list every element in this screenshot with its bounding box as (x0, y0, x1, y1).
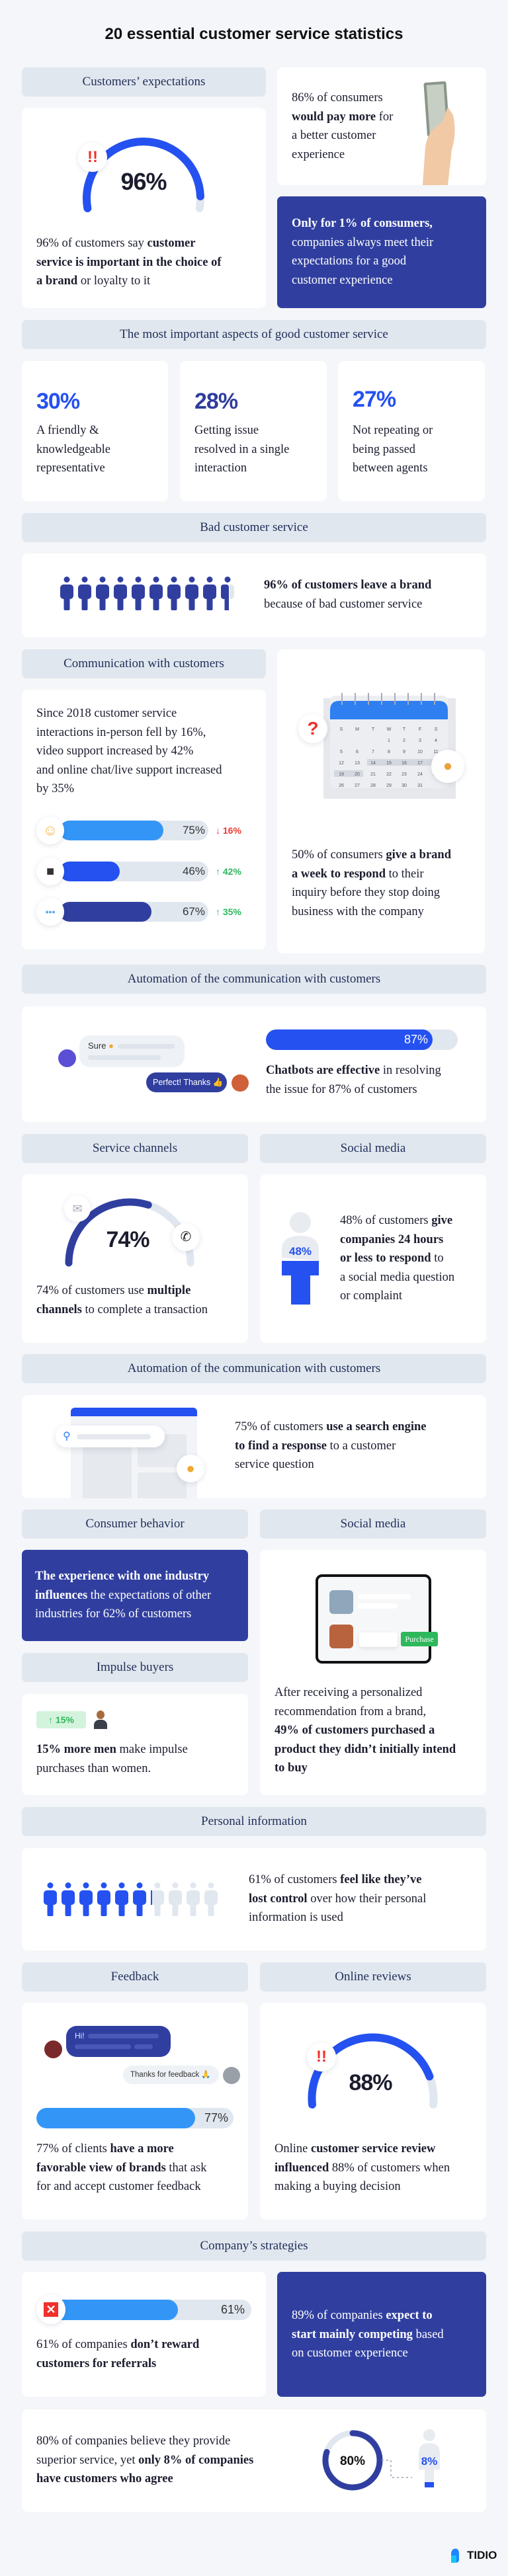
bar: 61%: 61% (221, 2303, 245, 2316)
header: social media 2 (260, 1509, 486, 1539)
panel: 30%: representative (36, 462, 105, 475)
icon: calendar: S (435, 727, 438, 732)
header: bad customer service: Bad customer service (200, 520, 308, 534)
icon: calendar: 16 (402, 761, 407, 766)
text (36, 237, 222, 288)
text: would pay more for (292, 110, 393, 123)
bar: video: ↑ 42% (216, 866, 241, 877)
header: impulse buyers: Impulse buyers (97, 1660, 173, 1674)
bar: 87% (266, 1029, 458, 1050)
text (340, 1214, 454, 1303)
icon: calendar: 13 (355, 761, 360, 766)
text: 48% of customers give (340, 1214, 452, 1227)
icon: browser search: ● (186, 1460, 195, 1476)
icon: phone (172, 1223, 200, 1251)
text: 86% of consumers (292, 91, 383, 104)
panel: feedback (22, 2003, 248, 2220)
text: service question (235, 1458, 314, 1471)
header: social media 2: Social media (341, 1517, 405, 1531)
text: a brand or loyalty to it (36, 274, 150, 288)
header: most important aspects: The most important aspects of good customer service (120, 327, 388, 341)
header: service channels (22, 1134, 248, 1163)
icon: calendar: 19 (339, 772, 344, 777)
icon: calendar: 22 (386, 772, 392, 777)
panel: 28% (180, 361, 327, 501)
icon: question mark (298, 714, 327, 743)
panel: 89% blue card: on customer experience (292, 2347, 408, 2360)
text: a week to respond to their (292, 867, 424, 881)
text: After receiving a personalized (275, 1686, 422, 1699)
panel: pay more card (277, 67, 486, 185)
text: 61% of customers feel like they’ve (249, 1873, 422, 1886)
chart: donut 80% and person 8%: 80% (340, 2454, 365, 2468)
chart: people 61% (44, 1882, 218, 1916)
icon: calendar: 4 (435, 739, 437, 743)
text: Since 2018 customer service (36, 707, 177, 720)
header: automation 2: Automation of the communication with customers (128, 1361, 380, 1375)
panel: 30%: 30% (36, 389, 79, 414)
bar: 77% (36, 2108, 233, 2128)
panel: search engine (22, 1395, 486, 1498)
header: online reviews: Online reviews (335, 1970, 411, 1984)
panel: 27%: 27% (353, 387, 396, 412)
bar: chat: ••• (46, 906, 55, 917)
text: 50% of consumers give a brand (292, 848, 451, 862)
text: and online chat/live support increased (36, 763, 222, 776)
text: 61% of companies don’t reward (36, 2338, 199, 2351)
bar: 61% (50, 2300, 251, 2320)
header: online reviews (260, 1962, 486, 1992)
panel: 27%: being passed (353, 443, 415, 456)
gauge value: 88% (349, 2070, 392, 2095)
icon: calendar: 31 (417, 784, 423, 788)
text (36, 2338, 200, 2370)
panel: 80% vs 8% (22, 2409, 486, 2512)
badge: +15%: ↑ 15% (48, 1714, 74, 1725)
bar: video (36, 862, 241, 887)
text: for and accept customer feedback (36, 2180, 201, 2193)
header: communication with customers: Communication with customers (64, 657, 224, 670)
text (292, 848, 451, 918)
panel: week to respond (277, 649, 485, 953)
logo: tidio (451, 2548, 497, 2563)
icon: calendar: 2 (403, 739, 405, 743)
chart: people 96% (60, 577, 234, 610)
text (36, 2142, 206, 2193)
icon: question mark: ? (307, 718, 319, 739)
text: channels to complete a transaction (36, 1303, 208, 1316)
header: customers' expectations: Customers’ expectations (83, 75, 205, 89)
panel: 62% blue card: The experience with one industry (35, 1570, 209, 1583)
panel: 96% gauge card (22, 108, 266, 308)
bar: chat: 67% (183, 905, 205, 918)
header: personal information: Personal information (201, 1814, 307, 1828)
header: consumer behavior (22, 1509, 248, 1539)
text: 80% of companies believe they provide (36, 2435, 230, 2448)
text: expectations for a good (292, 255, 406, 268)
header: impulse buyers (22, 1653, 248, 1682)
text (264, 579, 431, 611)
panel: 62% blue card (22, 1550, 248, 1641)
icon: browser search: ⚲ (63, 1431, 71, 1442)
text: purchases than women. (36, 1761, 151, 1775)
text (292, 91, 393, 161)
chat illustration: Sure ● (88, 1041, 114, 1051)
icon: alert (307, 2042, 336, 2072)
panel: social 48% (260, 1174, 486, 1343)
icon: calendar: T (403, 727, 406, 732)
text (266, 1064, 441, 1096)
text: Online customer service review (275, 2142, 435, 2155)
text: or less to respond to (340, 1252, 444, 1265)
header: automation 1 (22, 965, 486, 994)
text: a social media question (340, 1271, 454, 1284)
icon: email: ✉ (72, 1202, 83, 1215)
icon: calendar: 24 (417, 772, 423, 777)
text: 77% of clients have a more (36, 2142, 174, 2155)
text: because of bad customer service (264, 598, 422, 611)
panel: 28%: 28% (194, 389, 237, 414)
icon: calendar: 1 (388, 739, 390, 743)
icon: person emoji (431, 750, 464, 783)
panel: impulse (22, 1694, 248, 1795)
icon: calendar: W (387, 727, 392, 732)
text (36, 1284, 208, 1316)
text: companies 24 hours (340, 1232, 443, 1246)
panel: referrals (22, 2272, 266, 2397)
header: feedback: Feedback (111, 1970, 159, 1984)
text: 74% of customers use multiple (36, 1284, 190, 1297)
header: company's strategies: Company’s strategies (200, 2239, 308, 2253)
text: 15% more men make impulse (36, 1743, 188, 1756)
panel: channel changes (22, 690, 266, 949)
icon: calendar: 11 (433, 750, 439, 754)
text: information is used (249, 1911, 343, 1924)
bar: video: ■ (46, 864, 54, 879)
gauge 88% (308, 2033, 438, 2109)
icon: x mark (36, 2295, 65, 2324)
chart: donut 80% and person 8% (323, 2429, 440, 2490)
icon: calendar: 23 (402, 772, 407, 777)
text: business with the company (292, 905, 424, 918)
icon: calendar: 8 (388, 750, 390, 754)
header: social media: Social media (341, 1141, 405, 1155)
text: the issue for 87% of customers (266, 1083, 417, 1096)
text: companies always meet their (292, 235, 433, 249)
header: company's strategies (22, 2232, 486, 2261)
gauge 96% (83, 138, 204, 212)
panel: 89% blue card: 89% of companies expect to (292, 2309, 433, 2322)
text: lost control over how their personal (249, 1892, 426, 1906)
chat illustration (58, 1035, 249, 1092)
text: customer experience (292, 274, 393, 287)
text: have customers who agree (36, 2472, 173, 2485)
icon: browser search (54, 1408, 205, 1498)
text (292, 217, 433, 287)
panel: 62% blue card: industries for 62% of customers (35, 1607, 191, 1621)
icon: calendar: 5 (340, 750, 343, 754)
header: service channels: Service channels (93, 1141, 177, 1155)
header: automation 1: Automation of the communication with customers (128, 972, 380, 986)
text: 75% of customers use a search engine (235, 1420, 426, 1433)
panel: 27%: Not repeating or (353, 424, 433, 437)
panel: 27% (338, 361, 485, 501)
icon: alert (78, 143, 107, 172)
chart: donut 80% and person 8%: 8% (421, 2455, 437, 2468)
icon: calendar: 12 (339, 761, 344, 766)
text: to buy (275, 1761, 308, 1775)
text: video support increased by 42% (36, 745, 193, 758)
text (36, 2435, 253, 2485)
chat illustration (44, 2026, 240, 2084)
panel: personalized recommendation (260, 1550, 486, 1795)
text: 49% of customers purchased a (275, 1724, 435, 1737)
text: by 35% (36, 782, 74, 795)
bar: 87%: 87% (404, 1033, 428, 1046)
text: a better customer (292, 129, 376, 142)
text: product they didn’t initially intend (275, 1743, 456, 1756)
icon: tablet: Purchase (405, 1634, 434, 1644)
text: Only for 1% of consumers, (292, 217, 433, 230)
text: experience (292, 148, 345, 161)
panel: bad service (22, 553, 486, 637)
icon: calendar: 21 (370, 772, 376, 777)
title: 20 essential customer service statistics (105, 25, 403, 43)
text: superior service, yet only 8% of companies (36, 2453, 253, 2466)
panel: 28%: interaction (194, 462, 247, 475)
icon: man (94, 1711, 107, 1729)
text: customers for referrals (36, 2356, 156, 2370)
text (275, 1686, 456, 1775)
icon: tablet (316, 1574, 431, 1664)
bar: chat (36, 902, 241, 928)
icon: calendar (323, 693, 456, 799)
text: interactions in-person fell by 16%, (36, 726, 206, 739)
text (235, 1420, 426, 1471)
icon: calendar: 20 (355, 772, 360, 777)
text: making a buying decision (275, 2180, 401, 2193)
text: influenced 88% of customers when (275, 2161, 450, 2174)
text: Chatbots are effective in resolving (266, 1064, 441, 1077)
icon: calendar: 7 (372, 750, 374, 754)
icon: calendar: 30 (402, 784, 407, 788)
gauge 74% (65, 1198, 194, 1267)
icon: email (64, 1195, 91, 1222)
panel: chatbots (22, 1006, 486, 1122)
panel: 30%: A friendly & (36, 424, 99, 437)
icon: person emoji: ● (443, 757, 452, 775)
panel: personal info (22, 1848, 486, 1951)
icon: hand with money (423, 81, 455, 185)
text (36, 1743, 188, 1775)
header: automation 2 (22, 1354, 486, 1383)
icon: calendar: 9 (403, 750, 405, 754)
icon: calendar: 25 (433, 772, 439, 777)
text (275, 2142, 450, 2193)
icon: calendar: F (419, 727, 421, 732)
gauge value: 96% (120, 168, 167, 195)
gauge value: 74% (106, 1227, 149, 1252)
text: service is important in the choice of (36, 255, 221, 268)
icon: calendar: 10 (417, 750, 423, 754)
icon: alert: !! (87, 148, 98, 166)
icon: calendar: 3 (419, 739, 421, 743)
panel: 28%: resolved in a single (194, 443, 289, 456)
bar: in-person: ☺ (43, 822, 58, 838)
panel: 74% channels (22, 1174, 248, 1343)
text: 96% of customers say customer (36, 237, 195, 250)
panel: 28%: Getting issue (194, 424, 259, 437)
text (36, 707, 222, 795)
header: consumer behavior: Consumer behavior (85, 1517, 185, 1531)
chat illustration: Perfect! Thanks 👍 (153, 1078, 223, 1087)
icon: calendar: T (372, 727, 375, 732)
bar: video: 46% (183, 865, 205, 877)
chat illustration: Hi! (75, 2031, 85, 2040)
panel: online reviews (260, 2003, 486, 2220)
header: most important aspects (22, 320, 486, 349)
icon: alert: !! (316, 2048, 327, 2066)
icon: calendar: 28 (370, 784, 376, 788)
icon: calendar: 27 (355, 784, 360, 788)
text: favorable view of brands that ask (36, 2161, 206, 2174)
bar: 77%: 77% (204, 2111, 228, 2124)
bar: in-person: ↓ 16% (216, 825, 241, 836)
icon: x mark: ✕ (46, 2303, 56, 2316)
text: inquiry before they stop doing (292, 886, 440, 899)
panel: 89% blue card (277, 2272, 486, 2397)
header: social media (260, 1134, 486, 1163)
icon: phone: ✆ (181, 1230, 191, 1244)
bar: in-person: 75% (183, 824, 205, 836)
header: communication with customers (22, 649, 266, 678)
icon: calendar: 14 (370, 761, 376, 766)
header: feedback (22, 1962, 248, 1992)
icon: calendar: M (355, 727, 359, 732)
header: customers' expectations (22, 67, 266, 97)
bar: chat: ↑ 35% (216, 906, 241, 917)
icon: calendar: 18 (433, 761, 439, 766)
icon: calendar: S (340, 727, 343, 732)
panel: 1% blue card (277, 196, 486, 308)
panel: 62% blue card: influences the expectations of other (35, 1588, 211, 1601)
text: 96% of customers leave a brand (264, 579, 431, 592)
icon: person 48% (282, 1212, 319, 1305)
badge: +15% (36, 1711, 86, 1728)
icon: calendar: 26 (339, 784, 344, 788)
icon: calendar: 17 (417, 761, 423, 766)
text: or complaint (340, 1289, 402, 1303)
header: personal information (22, 1807, 486, 1836)
header: bad customer service (22, 513, 486, 542)
icon: calendar: 6 (356, 750, 359, 754)
chat illustration: Thanks for feedback 🙏 (130, 2071, 211, 2079)
panel: 89% blue card: start mainly competing based (292, 2327, 444, 2341)
icon: calendar: 29 (386, 784, 392, 788)
text (249, 1873, 426, 1924)
bar: in-person (36, 821, 241, 846)
logo: tidio: TIDIO (467, 2549, 497, 2561)
panel: 30%: knowledgeable (36, 443, 110, 456)
icon: person 48%: 48% (289, 1245, 312, 1258)
text: to find a response to a customer (235, 1439, 396, 1452)
panel: 30% (22, 361, 168, 501)
panel: 27%: between agents (353, 462, 428, 475)
text: recommendation from a brand, (275, 1705, 426, 1718)
icon: calendar: 15 (386, 761, 392, 766)
